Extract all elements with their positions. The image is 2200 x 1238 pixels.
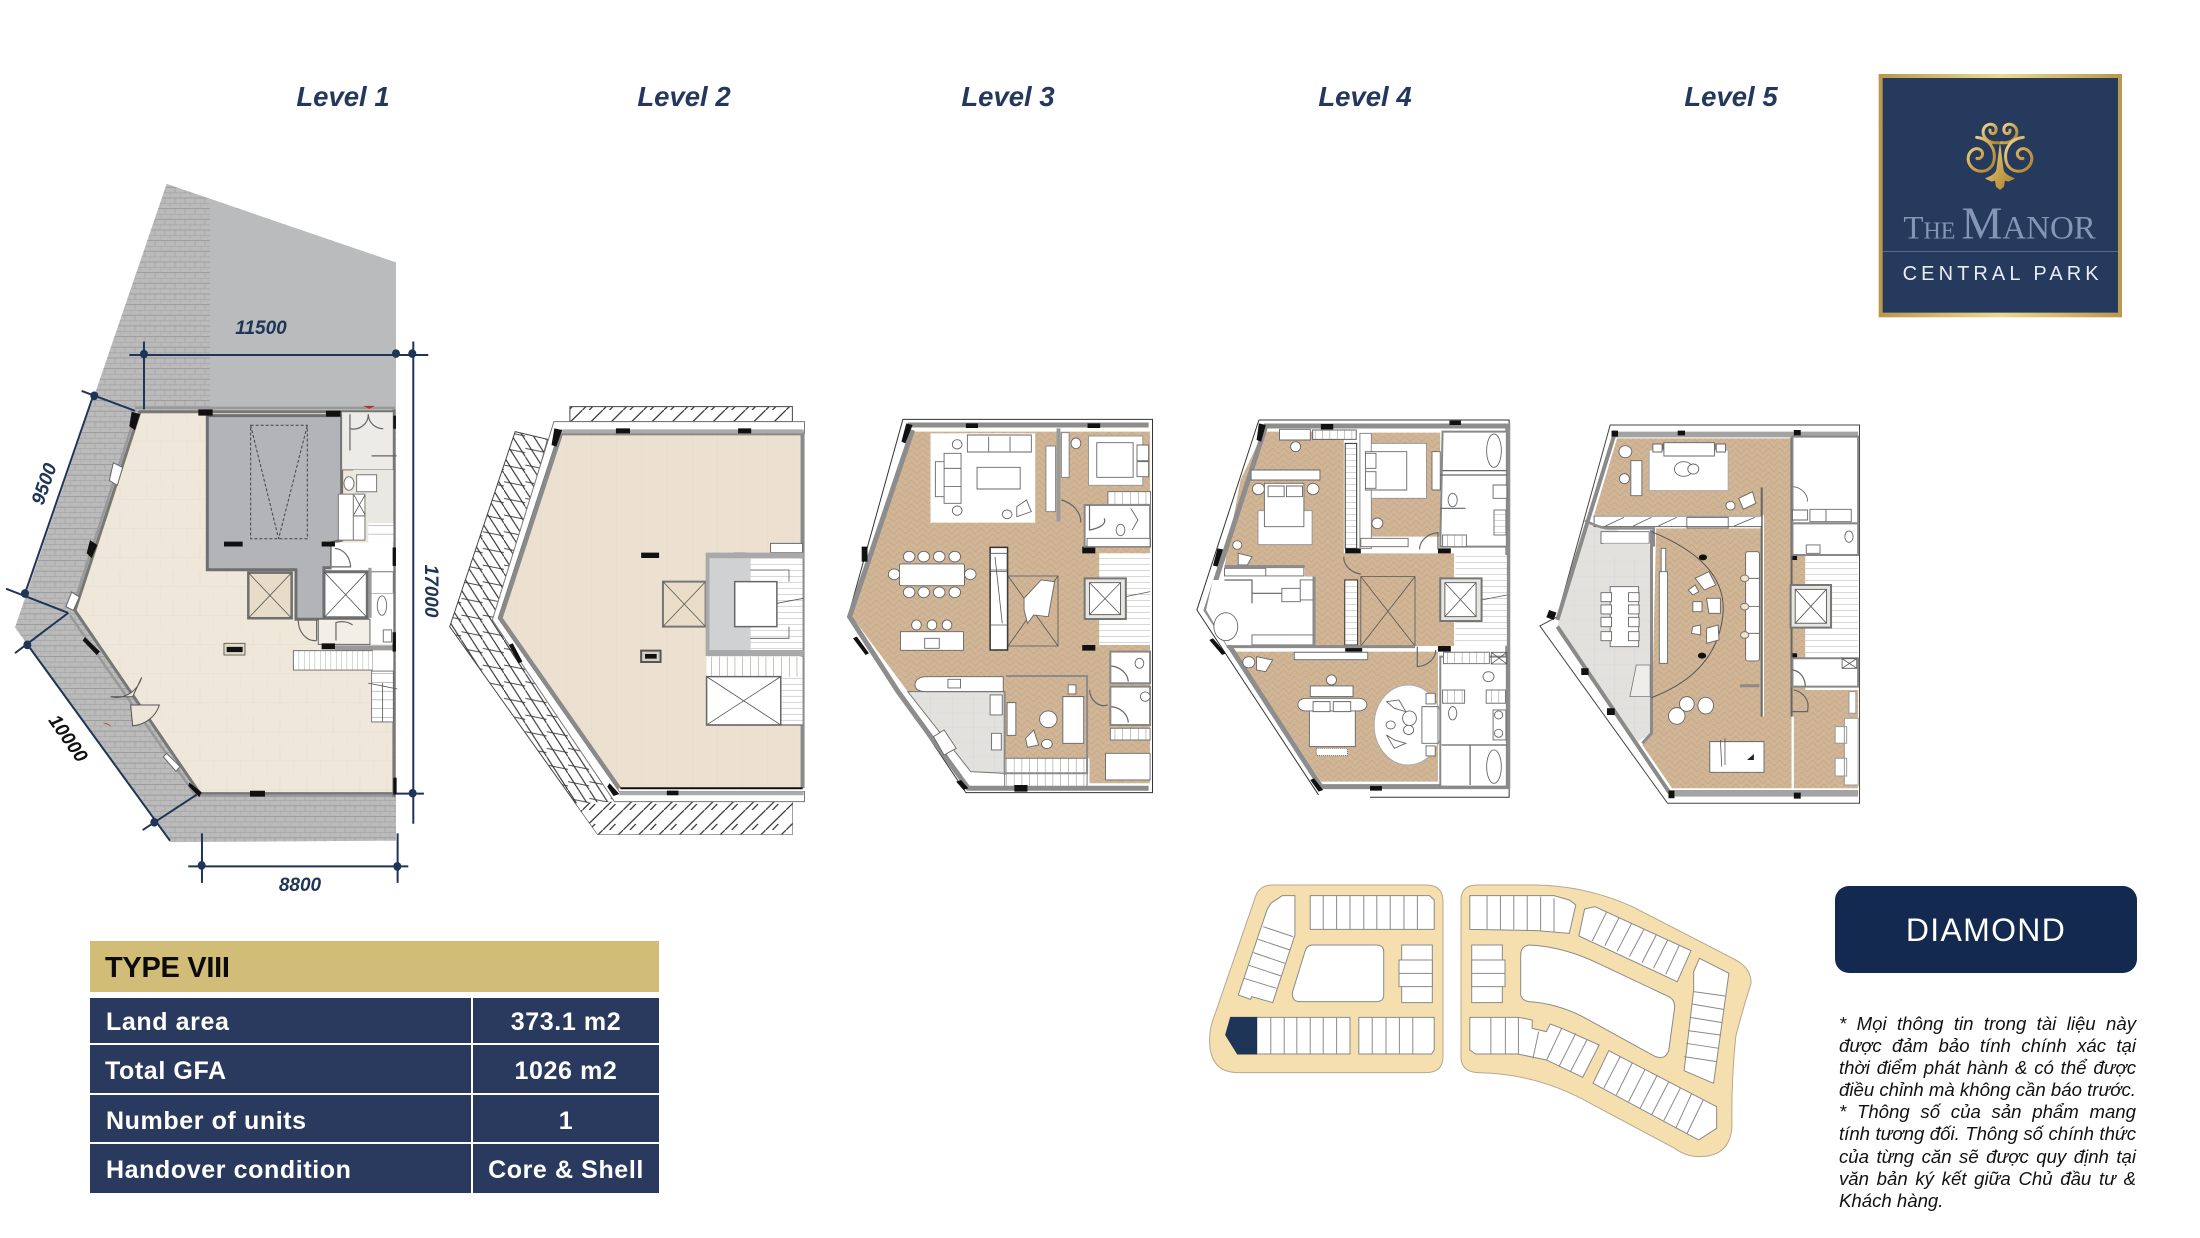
row: handover condition <box>90 1144 659 1193</box>
floor plan: Level 4 <box>1197 420 1509 797</box>
row: number of units <box>90 1095 659 1142</box>
highlighted unit <box>1226 1017 1257 1054</box>
logo wordmark: The Manor: THE MANOR <box>1903 197 2096 248</box>
row: land area: Land area <box>106 1008 230 1036</box>
row: handover condition: Handover condition <box>106 1156 352 1184</box>
disclaimer note: thời điểm phát hành & có thể được <box>1839 1057 2136 1078</box>
disclaimer note: * Mọi thông tin trong tài liệu này <box>1839 1013 2136 1034</box>
heading: Level 5: Level 5 <box>1684 81 1778 112</box>
row: land area: 373.1 m2 <box>511 1008 621 1036</box>
floor plan: Level 1 with dimensions: 17000 <box>420 565 441 618</box>
row: total GFA: Total GFA <box>105 1057 227 1085</box>
floor plan: Level 1 with dimensions: 10000 <box>44 711 92 767</box>
logo wordmark: Central Park: CENTRAL PARK <box>1903 263 2099 285</box>
row: total GFA: 1026 m2 <box>515 1057 617 1085</box>
disclaimer note: của từng căn sẽ được quy định tại <box>1839 1146 2136 1167</box>
disclaimer note: văn bản ký kết giữa Chủ đầu tư & <box>1839 1168 2136 1189</box>
disclaimer note: điều chỉnh mà không cần báo trước. <box>1839 1079 2136 1100</box>
disclaimer note: * Thông số của sản phẩm mang <box>1839 1101 2136 1122</box>
floor plan: Level 1 with dimensions <box>6 184 441 896</box>
row: total GFA <box>90 1045 659 1093</box>
badge: DIAMOND: DIAMOND <box>1906 912 2066 948</box>
logo: The Manor Central Park <box>1879 74 2122 317</box>
row: number of units: 1 <box>559 1107 573 1135</box>
floor plan: Level 1 with dimensions: 8800 <box>279 875 322 896</box>
floor plan: Level 1 with dimensions: 11500 <box>235 318 287 339</box>
heading: Level 3: Level 3 <box>961 81 1055 112</box>
disclaimer note: Khách hàng. <box>1839 1190 1943 1211</box>
disclaimer note: tính tương đối. Thông số chính thức <box>1839 1123 2136 1144</box>
table header: TYPE VIII: TYPE VIII <box>105 952 230 984</box>
floor plan: Level 5 <box>1540 425 1860 803</box>
disclaimer note <box>1839 1013 2137 1211</box>
key plan: site map with highlighted unit <box>1210 885 1751 1157</box>
table header: TYPE VIII <box>90 941 659 992</box>
icon: gold ornament <box>1968 124 2032 190</box>
badge: DIAMOND <box>1835 886 2137 973</box>
floor plan: Level 3 <box>837 419 1153 793</box>
heading: Level 1: Level 1 <box>296 81 390 112</box>
row: land area <box>90 998 659 1043</box>
floor plan: Level 1 with dimensions: 9500 <box>28 460 62 508</box>
specification table <box>90 941 659 1193</box>
row: number of units: Number of units <box>106 1107 307 1135</box>
row: handover condition: Core & Shell <box>488 1156 644 1184</box>
disclaimer note: được đảm bảo tính chính xác tại <box>1839 1035 2136 1056</box>
heading: Level 4: Level 4 <box>1318 81 1412 112</box>
heading: Level 2: Level 2 <box>637 81 731 112</box>
floor plan: Level 2 <box>450 407 804 834</box>
